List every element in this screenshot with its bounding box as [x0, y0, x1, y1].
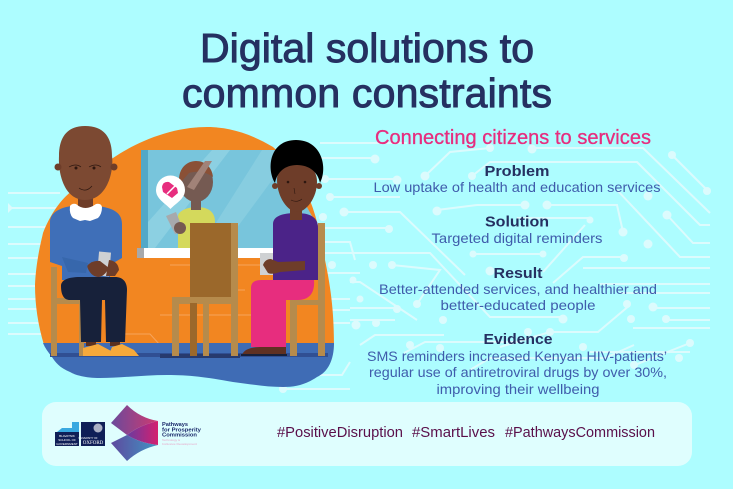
man in blue jumper	[50, 126, 139, 356]
title: common constraints	[182, 70, 552, 116]
blue floor	[43, 343, 334, 387]
logo: University of Oxford: OXFORD	[83, 441, 104, 446]
logo: University of Oxford	[78, 422, 105, 446]
title: Digital solutions to	[200, 25, 534, 71]
text block: evidence	[367, 331, 667, 397]
logo: Pathways for Prosperity Commission: Commission	[162, 432, 198, 438]
chair	[290, 223, 325, 356]
text block: evidence: Evidence	[484, 331, 552, 348]
person behind the window	[178, 207, 215, 248]
logo: Pathways for Prosperity Commission: Inclusive Development	[162, 442, 197, 446]
text block: result: better-educated people	[440, 297, 596, 313]
window with reflected person	[137, 150, 317, 258]
logo: Pathways for Prosperity Commission	[111, 405, 202, 461]
text block: evidence: improving their wellbeing	[436, 381, 600, 397]
text block: problem: Low uptake of health and education services	[374, 179, 660, 195]
text block: problem: Problem	[484, 163, 550, 180]
text block: evidence: SMS reminders increased Kenyan HIV-patients’	[367, 348, 667, 364]
logo: Blavatnik School of Government: BLAVATNIK	[59, 434, 75, 438]
icon: speech bubble with heart	[156, 176, 185, 209]
hashtags: #PositiveDisruption	[277, 425, 403, 441]
text block: solution: Targeted digital reminders	[432, 230, 602, 246]
text block: result: Result	[494, 265, 543, 282]
illustration: people waiting with phones	[35, 126, 334, 387]
jumper	[50, 206, 122, 280]
logo: Pathways for Prosperity Commission: for Prosperity	[162, 428, 202, 434]
text block: problem	[374, 163, 660, 195]
logo: Blavatnik School of Government: GOVERNMENT	[56, 442, 78, 446]
text block: result: Better-attended services, and healthier and	[379, 281, 657, 297]
logo: Pathways for Prosperity Commission: Technology &	[162, 438, 180, 442]
trousers	[61, 277, 127, 342]
text block: result	[379, 265, 657, 313]
footer panel	[42, 402, 692, 466]
empty chair	[172, 223, 238, 356]
title	[182, 25, 552, 116]
text block: solution: Solution	[485, 214, 549, 230]
hashtags: #PathwaysCommission	[505, 425, 655, 441]
logo: Pathways for Prosperity Commission: Pathways	[162, 422, 188, 428]
subheading: Connecting citizens to services	[375, 127, 651, 149]
hashtags	[277, 425, 655, 441]
woman in purple top	[241, 140, 325, 356]
logo: Blavatnik School of Government: SCHOOL OF	[58, 438, 76, 442]
hashtags: #SmartLives	[412, 425, 495, 441]
logo: University of Oxford: UNIVERSITY OF	[78, 437, 98, 440]
text block: solution	[432, 214, 602, 246]
logo: Blavatnik School of Government	[55, 422, 79, 446]
orange background blob	[35, 127, 334, 345]
text block: evidence: regular use of antiretroviral drugs by over 30%,	[369, 364, 667, 380]
chair	[51, 267, 84, 356]
